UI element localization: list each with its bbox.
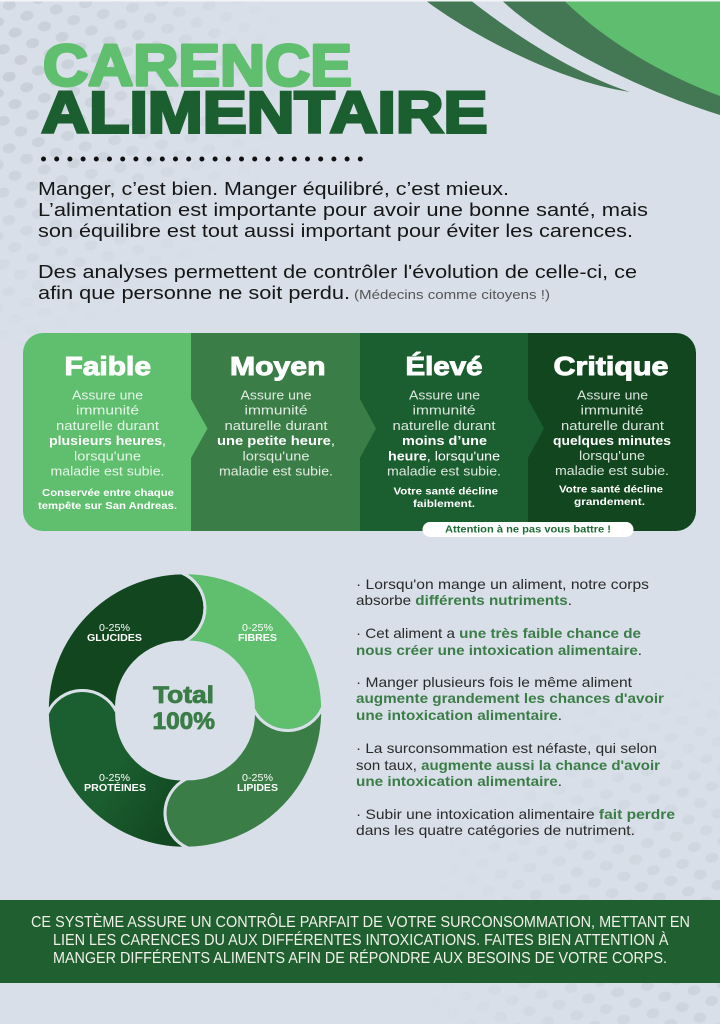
bullet 3	[356, 674, 665, 723]
column: Élevé: naturelle durant	[392, 419, 496, 433]
intro text: L’alimentation est importante pour avoir une bonne santé, mais	[38, 199, 648, 220]
intro text: afin que personne ne soit perdu.	[38, 282, 350, 303]
column: Critique: maladie est subie.	[555, 464, 669, 478]
footer banner: LIEN LES CARENCES DU AUX DIFFÉRENTES INTOXICATIONS. FAITES BIEN ATTENTION À	[53, 932, 669, 949]
column: Moyen	[217, 351, 335, 478]
bullet 1: · Lorsqu'on mange un aliment, notre corps	[356, 576, 649, 592]
segment: fibres	[182, 573, 323, 730]
label: protéines: 0-25%	[99, 772, 130, 784]
column: Faible: naturelle durant	[56, 419, 160, 433]
column: Moyen: Moyen	[230, 351, 326, 381]
bullet 3: · Manger plusieurs fois le même aliment	[356, 674, 632, 690]
column: Critique: lorsqu'une	[579, 449, 645, 463]
column: Faible: lorsqu'une	[74, 450, 141, 464]
label: lipides: LIPIDES	[237, 782, 278, 794]
column: Élevé: heure , lorsqu'une	[388, 450, 500, 464]
column: Critique: Assure une	[577, 388, 648, 402]
bullet 4: son taux, augmente aussi la chance d'avoir	[356, 757, 661, 773]
column: Élevé: faiblement.	[413, 498, 475, 510]
label: glucides: 0-25%	[99, 622, 130, 634]
segment: glucides	[47, 573, 205, 714]
bullet 3: augmente grandement les chances d'avoir	[356, 690, 665, 706]
column: Moyen: naturelle durant	[224, 419, 328, 433]
label: lipides: 0-25%	[242, 772, 273, 784]
column: Critique: grandement.	[574, 496, 645, 508]
bullet 4: une intoxication alimentaire .	[356, 773, 562, 789]
column: Moyen: immunité	[244, 404, 308, 418]
column: Élevé: moins d’une	[402, 434, 487, 448]
column: Critique	[553, 351, 671, 508]
column: Critique: Critique	[554, 351, 668, 381]
donut chart: nutrients	[47, 573, 323, 848]
column: Élevé: Assure une	[409, 388, 480, 402]
column: Élevé	[387, 351, 501, 510]
intro text: Des analyses permettent de contrôler l'évolution de celle-ci, ce	[38, 261, 637, 282]
ring segments	[47, 573, 323, 848]
bullet 4	[356, 740, 661, 789]
intro text: son équilibre est tout aussi important pour éviter les carences.	[38, 220, 633, 241]
intro text	[38, 178, 648, 303]
intro text: Manger, c’est bien. Manger équilibré, c’est mieux.	[38, 178, 509, 199]
column: Faible	[38, 351, 177, 512]
bullet 5	[356, 806, 675, 838]
column: Faible: Assure une	[72, 388, 143, 402]
column: Moyen: Assure une	[240, 388, 312, 402]
column: Moyen: maladie est subie.	[219, 464, 333, 478]
bullet 2	[356, 625, 642, 658]
center total: 100%	[152, 708, 215, 735]
segment: lipides	[165, 707, 323, 848]
callout: warning pill: Attention à ne pas vous battre !	[445, 524, 611, 536]
segment: protéines	[47, 691, 188, 848]
column: Élevé: immunité	[412, 404, 476, 418]
column: Faible: Conservée entre chaque	[42, 487, 174, 499]
label: lipides	[237, 772, 278, 794]
label: fibres: FIBRES	[238, 632, 277, 644]
column: Élevé: Élevé	[406, 351, 482, 381]
column: Moyen: une petite heure ,	[217, 434, 335, 448]
title	[42, 34, 488, 146]
intro text: (Médecins comme citoyens !)	[354, 287, 550, 302]
decorative green swoosh, top right	[427, 2, 720, 115]
column: Critique: quelques minutes	[553, 434, 671, 448]
bullet 2: · Cet aliment a une très faible chance de	[356, 625, 641, 641]
label: glucides: GLUCIDES	[87, 632, 142, 644]
bullet 4: · La surconsommation est néfaste, qui selon	[356, 740, 657, 756]
bullet 1: absorbe différents nutriments .	[356, 592, 572, 608]
column: Faible: plusieurs heures ,	[49, 434, 166, 448]
label: fibres: 0-25%	[242, 622, 273, 634]
center total: Total	[153, 682, 214, 709]
column: Élevé: maladie est subie.	[387, 464, 501, 478]
column: Moyen: lorsqu'une	[242, 450, 310, 464]
bullet 5: dans les quatre catégories de nutriment.	[356, 822, 635, 838]
bullet 5: · Subir une intoxication alimentaire fait perdre	[356, 806, 675, 822]
bullet list	[356, 576, 675, 838]
title: CARENCE	[43, 34, 352, 98]
label: protéines: PROTÉINES	[84, 781, 146, 794]
label: protéines	[84, 772, 146, 794]
column: Faible: immunité	[76, 404, 139, 418]
column: Critique: immunité	[580, 404, 644, 418]
bullet 3: une intoxication alimentaire .	[356, 707, 562, 723]
label: glucides	[87, 622, 142, 644]
bullet 2: nous créer une intoxication alimentaire .	[356, 642, 642, 658]
footer banner: MANGER DIFFÉRENTS ALIMENTS AFIN DE RÉPONDRE AUX BESOINS DE VOTRE CORPS.	[53, 950, 667, 967]
column: Élevé: Votre santé décline	[394, 486, 498, 498]
panel: health levels	[23, 333, 696, 537]
column backgrounds with arrow notches	[23, 333, 696, 531]
dotted divider	[44, 156, 362, 162]
column: Faible: tempête sur San Andreas.	[38, 500, 177, 512]
bullet 1	[356, 576, 649, 608]
column: Faible: Faible	[64, 351, 151, 381]
title: ALIMENTAIRE	[42, 80, 488, 146]
column: Critique: Votre santé décline	[559, 484, 663, 496]
footer banner: CE SYSTÈME ASSURE UN CONTRÔLE PARFAIT DE VOTRE SURCONSOMMATION, METTANT EN	[31, 914, 690, 931]
column: Critique: naturelle durant	[561, 419, 665, 433]
column: Faible: maladie est subie.	[50, 464, 164, 478]
callout: warning pill	[422, 522, 634, 537]
label: fibres	[238, 622, 277, 644]
center total	[152, 682, 215, 735]
footer banner	[0, 900, 720, 983]
